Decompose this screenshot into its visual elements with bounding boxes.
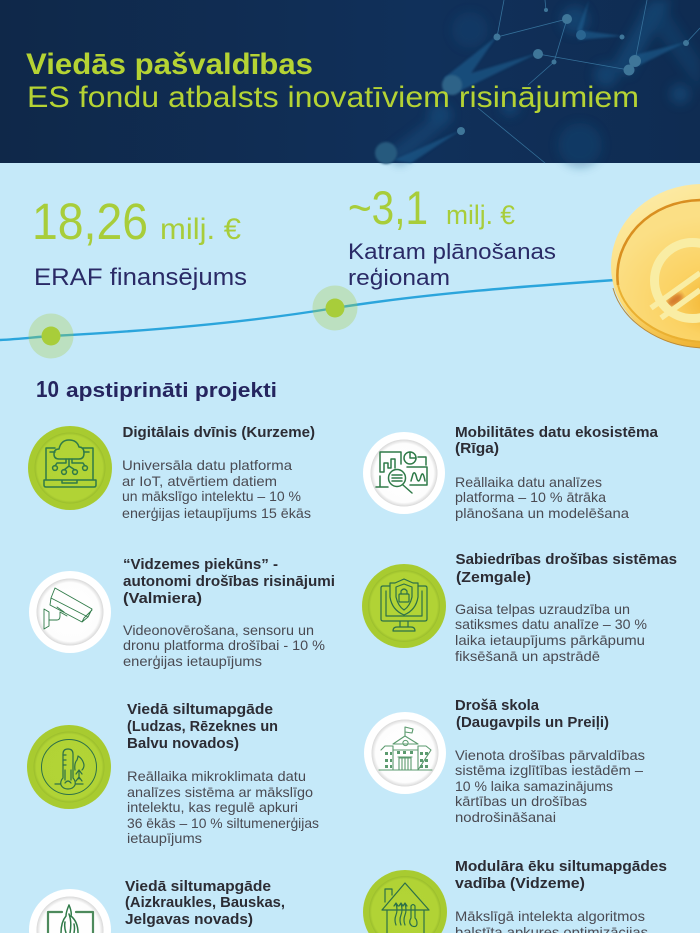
heading: Drošā skola — [455, 698, 540, 714]
heading: (Valmiera) — [123, 591, 202, 607]
project: smart heating Aizkraukle — [29, 879, 285, 933]
heading: (Ludzas, Rēzeknes un — [127, 719, 278, 735]
heading: (Rīga) — [455, 441, 499, 457]
stat: per region — [348, 181, 556, 290]
title: Viedās pašvaldības — [26, 48, 313, 81]
icon: data analysis — [363, 432, 445, 514]
icon: shield monitor — [362, 564, 446, 648]
section heading — [36, 376, 277, 402]
description: analīzes sistēma ar mākslīgo — [127, 785, 313, 800]
heading — [455, 859, 667, 892]
heading — [125, 879, 285, 928]
stat: per region: Katram plānošanas — [348, 239, 556, 264]
project: smart heating Ludza — [27, 702, 319, 846]
title: ES fondu atbalsts inovatīviem risinājumiem — [27, 81, 639, 114]
stat: per region: reģionam — [348, 265, 450, 290]
growth line with markers — [0, 280, 615, 358]
heading: Jelgavas novads) — [125, 912, 253, 928]
description: Reāllaika mikroklimata datu — [127, 769, 306, 784]
icon: cloud laptop — [28, 426, 112, 510]
header banner — [0, 0, 700, 167]
description — [455, 909, 648, 933]
heading — [455, 425, 659, 457]
description: kārtības un drošības — [455, 794, 587, 809]
description: satiksmes datu analīze – 30 % — [455, 617, 647, 632]
heading: “Vidzemes piekūns” - — [123, 557, 278, 573]
description: Videonovērošana, sensoru un — [123, 623, 314, 638]
heading: autonomi drošības risinājumi — [123, 574, 335, 590]
heading — [455, 698, 609, 731]
heading: Modulāra ēku siltumapgādes — [455, 859, 667, 875]
project: digital twin — [28, 425, 315, 521]
stat: ERAF funding — [32, 193, 247, 291]
stat: ERAF funding: 18,26 — [32, 193, 148, 250]
section heading: apstiprināti projekti — [66, 380, 277, 402]
icon: gold euro coin — [611, 184, 700, 348]
description — [455, 475, 629, 521]
heading: Mobilitātes datu ekosistēma — [455, 425, 659, 441]
icon: security camera — [29, 571, 111, 653]
description: enerģijas ietaupījums 15 ēkās — [122, 506, 311, 521]
heading: Digitālais dvīnis (Kurzeme) — [122, 425, 315, 441]
description: fiksēšanā un apstrādē — [455, 649, 600, 664]
description: dronu platforma drošībai - 10 % — [123, 638, 325, 653]
description: Reāllaika datu analīzes — [455, 475, 602, 490]
description: 10 % laika samazinājums — [455, 779, 613, 794]
section heading: 10 — [36, 376, 59, 402]
project: Vidzemes piekuns — [29, 557, 335, 669]
heading: (Daugavpils un Preiļi) — [456, 715, 609, 731]
description: laika ietaupījums pārkāpumu — [455, 633, 645, 648]
description: plānošana un modelēšana — [455, 506, 629, 521]
heading: Balvu novados) — [127, 736, 239, 752]
network graphic — [375, 0, 700, 167]
stat: ERAF funding: ERAF finansējums — [34, 264, 247, 291]
heading — [127, 702, 278, 752]
project: modular heating — [363, 859, 667, 933]
description — [455, 748, 645, 825]
icon: house with thermometer — [363, 870, 447, 933]
description: nodrošināšanai — [455, 810, 556, 825]
heading — [123, 557, 335, 607]
description — [455, 602, 647, 664]
description — [127, 769, 319, 846]
icon: thermometer and flame — [27, 725, 111, 809]
description: intelektu, kas regulē apkuri — [127, 800, 298, 815]
heading: Sabiedrības drošības sistēmas — [456, 552, 677, 568]
heading: Viedā siltumapgāde — [125, 879, 271, 895]
heading: (Aizkraukles, Bauskas, — [125, 895, 285, 911]
description: platforma – 10 % ātrāka — [455, 490, 606, 505]
icon: flame in frame — [29, 889, 111, 933]
heading: (Zemgale) — [456, 570, 531, 586]
project: mobility data — [363, 425, 659, 521]
description — [122, 458, 311, 521]
heading — [456, 552, 677, 586]
description: ietaupījums — [127, 831, 202, 846]
project: public safety — [362, 552, 677, 664]
stat: per region: milj. € — [446, 200, 515, 230]
project: safe school — [364, 698, 645, 825]
description: Universāla datu platforma — [122, 458, 292, 473]
description: 36 ēkās – 10 % siltumenerģijas — [127, 816, 319, 831]
description — [123, 623, 325, 669]
description: Mākslīgā intelekta algoritmos — [455, 909, 645, 924]
stat: per region: ~3,1 — [348, 181, 428, 234]
stat: ERAF funding: milj. € — [160, 213, 241, 246]
icon: school building — [364, 712, 446, 794]
heading: vadība (Vidzeme) — [455, 876, 585, 892]
title — [26, 48, 639, 114]
description: Vienota drošības pārvaldības — [455, 748, 645, 763]
description: ar IoT, atvērtiem datiem — [122, 474, 277, 489]
description: enerģijas ietaupījums — [123, 654, 262, 669]
description: sistēma izglītības iestādēm – — [455, 763, 643, 778]
marker 1 — [28, 314, 74, 358]
marker 2 — [312, 286, 358, 330]
heading: Viedā siltumapgāde — [127, 702, 273, 718]
description: un mākslīgo intelektu – 10 % — [122, 489, 301, 504]
description: Gaisa telpas uzraudzība un — [455, 602, 630, 617]
